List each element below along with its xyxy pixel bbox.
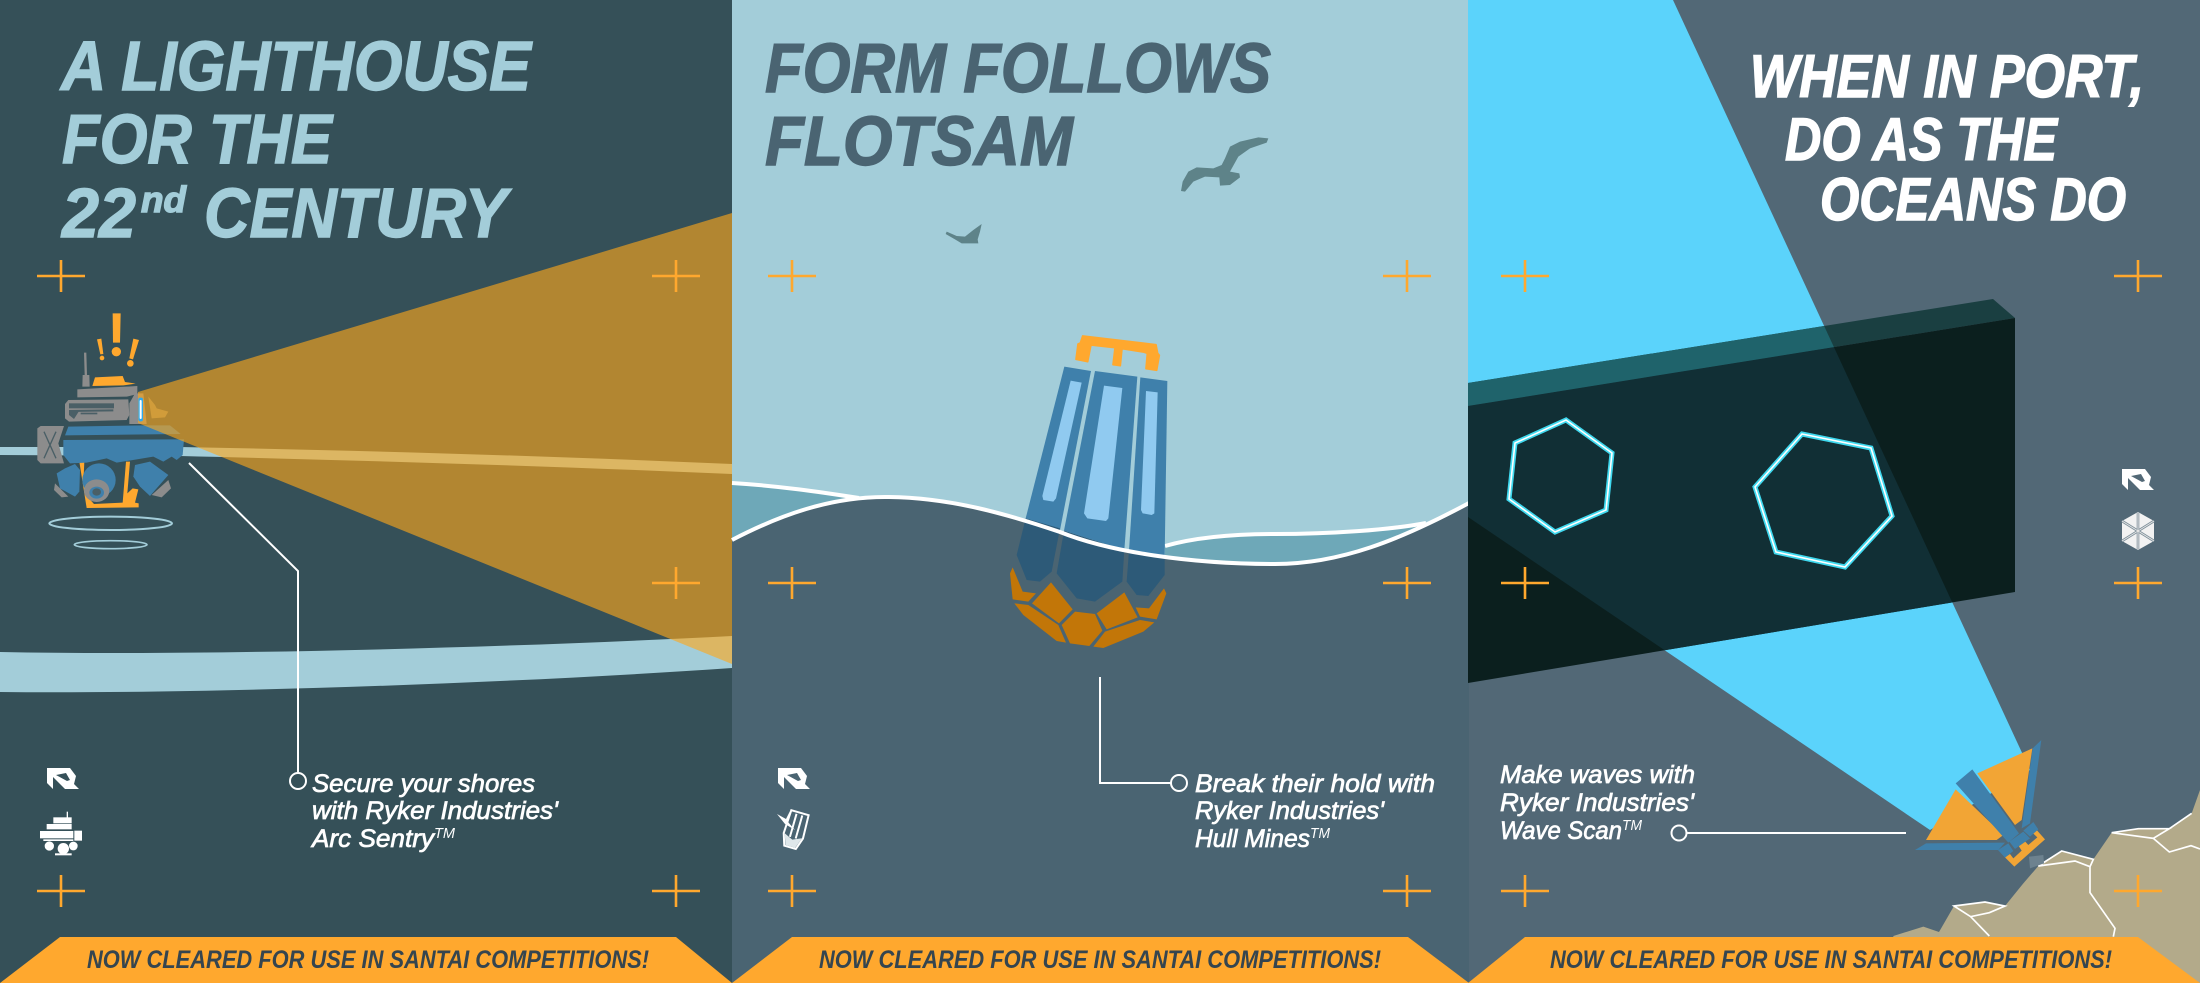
heading: nd [141, 179, 187, 220]
heading: WHEN IN PORT, [1750, 43, 2144, 110]
banner [732, 937, 1469, 983]
heading: FOR THE [62, 100, 334, 178]
heading: A LIGHTHOUSE [59, 27, 533, 105]
banner [1468, 937, 2200, 983]
rocks [1893, 790, 2200, 983]
callout text [1195, 770, 1435, 853]
sea [732, 497, 1469, 983]
callout text: Arc Sentry [310, 825, 436, 853]
icon: arc sentry robot [37, 313, 184, 549]
banner [0, 937, 732, 983]
registration crosses [37, 260, 700, 907]
right hexagon [1755, 434, 1892, 567]
callout text: TM [434, 825, 455, 842]
callout text: TM [1622, 817, 1642, 834]
horizon band [0, 447, 732, 474]
left hexagon [1509, 420, 1612, 532]
icon: small bird [946, 224, 982, 243]
panel: a lighthouse for the 22nd century [0, 0, 732, 983]
icon: large bird [1181, 137, 1268, 192]
heading: 22 [60, 174, 136, 252]
heading: OCEANS DO [1820, 166, 2126, 233]
icon: wave scan device [1915, 740, 2045, 868]
icon: hex sensor [2122, 512, 2154, 550]
heading: DO AS THE [1785, 106, 2059, 173]
light beam [138, 213, 732, 664]
heading: FORM FOLLOWS [765, 29, 1271, 107]
callout text: Ryker Industries' [1195, 797, 1385, 825]
foreground wave band [0, 636, 732, 692]
registration crosses [1501, 260, 2162, 907]
heading: CENTURY [204, 174, 512, 252]
icon: small mine [780, 810, 810, 850]
callout text [310, 770, 559, 853]
callout text [1500, 761, 1695, 845]
callout leader line [1672, 826, 1906, 840]
icon: small sentry [40, 812, 82, 855]
sentry lamp [138, 397, 168, 421]
callout text: Hull Mines [1195, 825, 1310, 853]
icon: hull mine [1010, 336, 1167, 648]
icon: ryker logo [778, 768, 810, 789]
panel: form follows flotsam [732, 0, 1469, 983]
callout text: Break their hold with [1195, 770, 1435, 798]
sonar beam [1468, 0, 2030, 830]
icon: ryker logo [47, 768, 79, 789]
banner: NOW CLEARED FOR USE IN SANTAI COMPETITIONS! [87, 946, 649, 974]
heading: FLOTSAM [765, 102, 1075, 180]
dark wall [1468, 299, 2015, 683]
banner: NOW CLEARED FOR USE IN SANTAI COMPETITIONS! [1550, 946, 2112, 974]
back waves [732, 483, 1426, 570]
panel: when in port [1468, 0, 2200, 983]
callout text: Ryker Industries' [1500, 789, 1695, 817]
heading [765, 29, 1271, 180]
callout leader line [189, 463, 306, 789]
icon: ryker logo [2122, 469, 2154, 490]
banner: NOW CLEARED FOR USE IN SANTAI COMPETITIONS! [819, 946, 1381, 974]
wave line [732, 497, 1469, 564]
callout text: Wave Scan [1500, 817, 1622, 845]
icon: mine sparkle [777, 811, 795, 830]
registration crosses [768, 260, 1431, 907]
callout leader line [1100, 677, 1187, 791]
callout text: Secure your shores [312, 770, 535, 798]
callout text: TM [1310, 825, 1330, 842]
callout text: Make waves with [1500, 761, 1695, 789]
heading [59, 27, 533, 252]
callout text: with Ryker Industries' [312, 797, 559, 825]
heading [1750, 43, 2144, 233]
